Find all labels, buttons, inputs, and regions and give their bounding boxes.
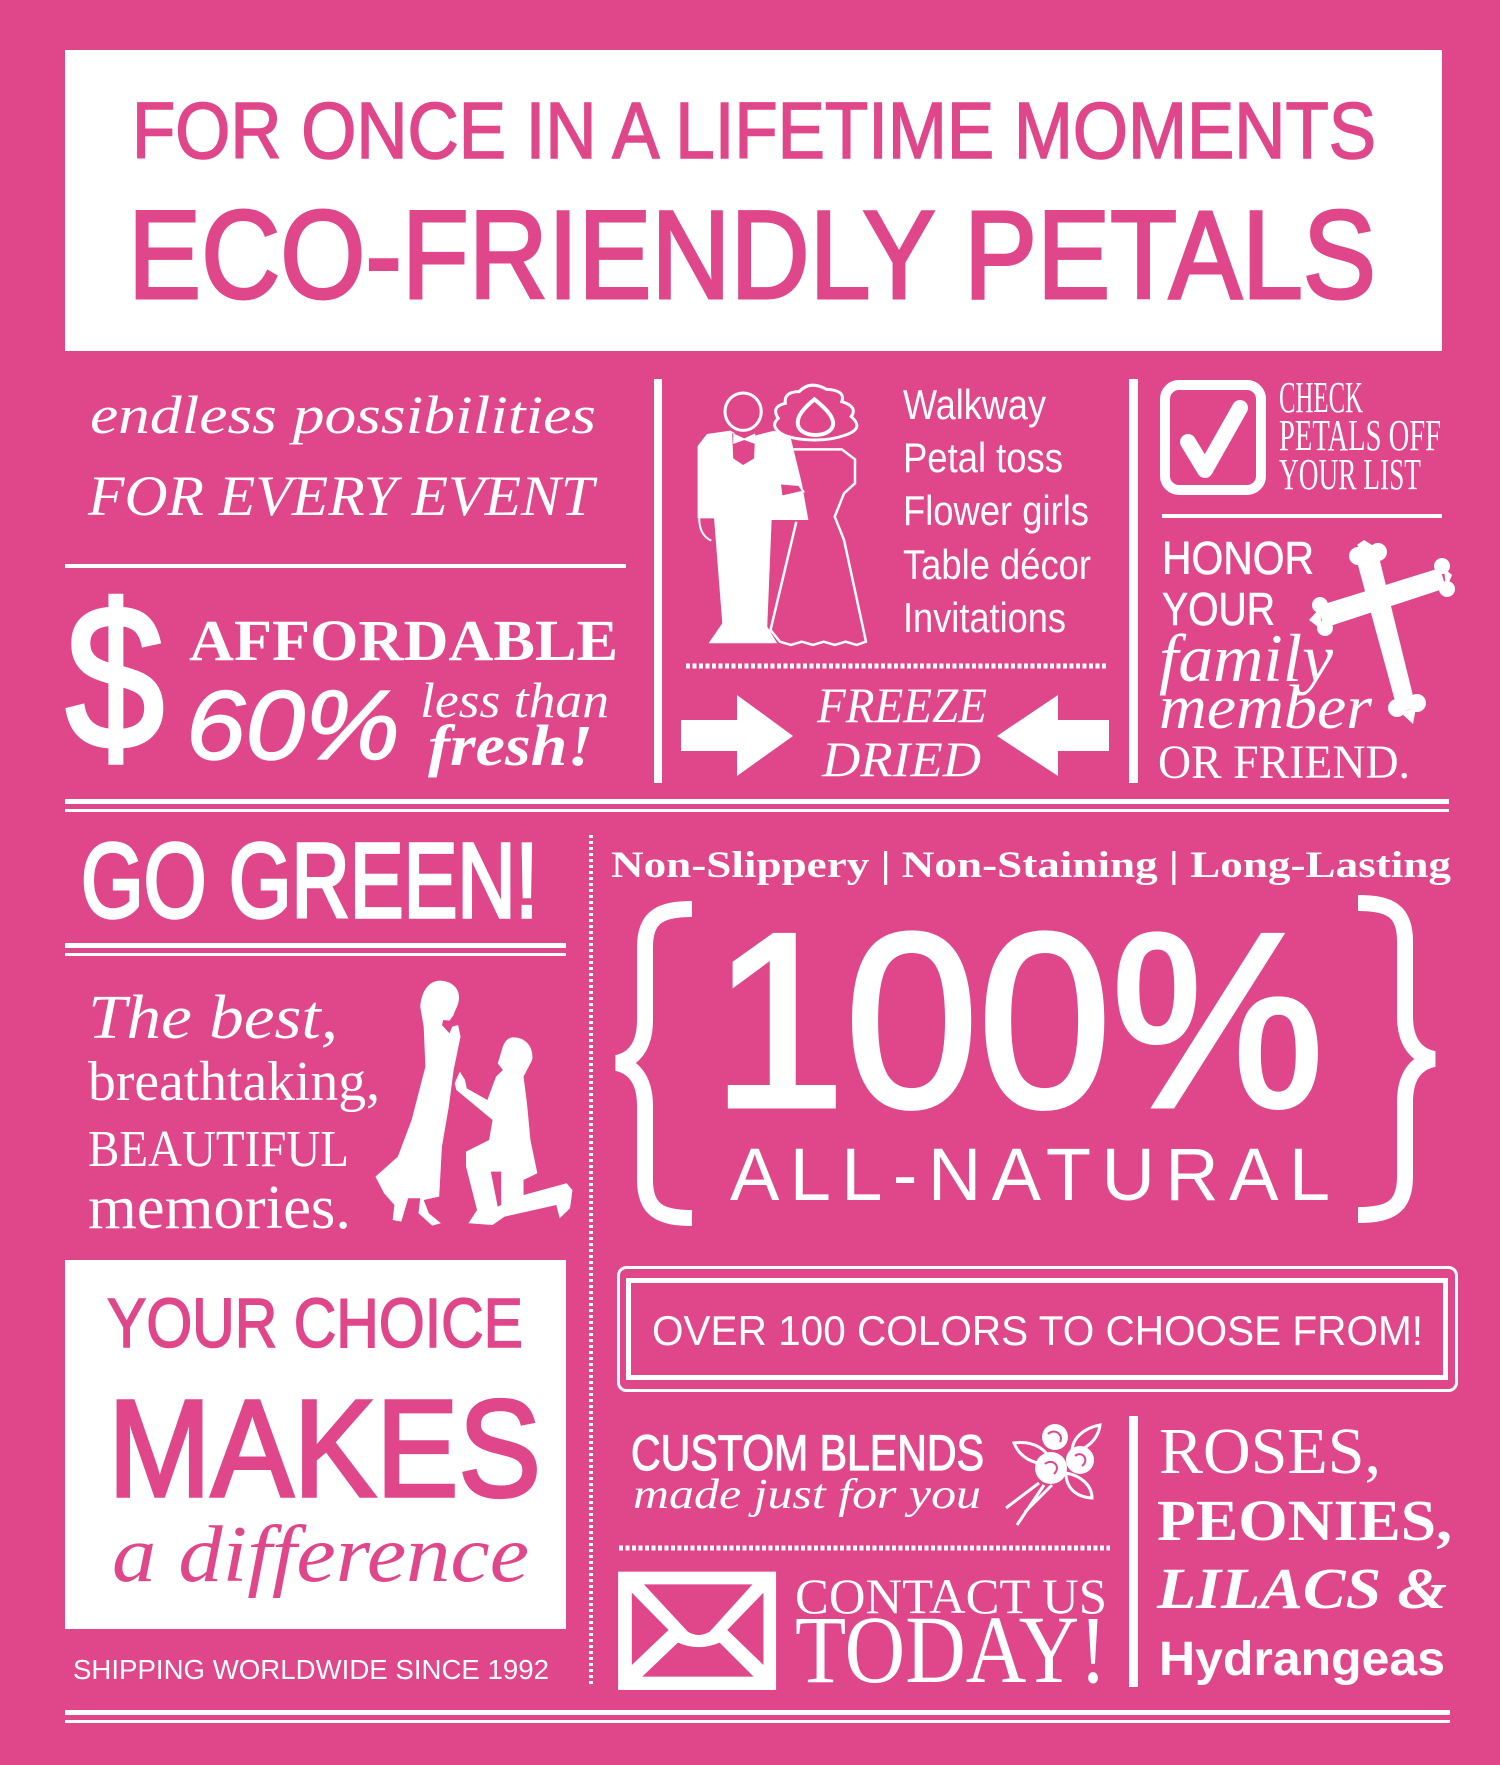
panel: affordable bbox=[66, 563, 618, 792]
panel: honor family member bbox=[1158, 532, 1455, 789]
panel: flower types bbox=[1156, 1415, 1452, 1686]
panel: endless possibilities bbox=[87, 385, 598, 528]
list of uses bbox=[903, 381, 1091, 641]
contact us: CONTACT US bbox=[795, 1568, 1107, 1624]
list of uses: Table décor bbox=[903, 541, 1091, 588]
right brace bbox=[1358, 903, 1434, 1215]
icon: envelope bbox=[618, 1572, 776, 1690]
dried: DRIED bbox=[821, 731, 981, 787]
left brace bbox=[617, 909, 692, 1218]
sixty percent: 60% bbox=[186, 670, 400, 780]
arrow: left bbox=[997, 695, 1109, 776]
hydrangeas: Hydrangeas bbox=[1159, 1633, 1445, 1686]
panel: colors box bbox=[618, 1268, 1456, 1390]
your choice: YOUR CHOICE bbox=[107, 1284, 523, 1362]
today: TODAY! bbox=[795, 1596, 1107, 1703]
honor: HONOR bbox=[1162, 532, 1314, 584]
panel: go green bbox=[65, 822, 572, 1242]
colors text: OVER 100 COLORS TO CHOOSE FROM! bbox=[652, 1307, 1423, 1354]
checklist text: CHECK bbox=[1279, 373, 1363, 422]
made just for you: made just for you bbox=[633, 1472, 981, 1518]
icon: cross bbox=[1309, 540, 1455, 724]
peonies: PEONIES, bbox=[1157, 1488, 1452, 1553]
the best text: BEAUTIFUL bbox=[88, 1121, 349, 1178]
list of uses: Invitations bbox=[903, 594, 1066, 641]
icon: proposal silhouette bbox=[375, 981, 572, 1226]
your: YOUR bbox=[1162, 583, 1275, 635]
tagline script: endless possibilities bbox=[90, 385, 596, 445]
panel: your choice makes a difference bbox=[65, 1260, 566, 1629]
icon: dollar sign: $ bbox=[66, 563, 164, 792]
checklist text bbox=[1279, 373, 1441, 499]
family: family bbox=[1159, 620, 1334, 696]
the best text bbox=[88, 984, 380, 1242]
less than: less than bbox=[420, 672, 609, 728]
heading: go green: GO GREEN! bbox=[81, 822, 538, 940]
icon: bouquet bbox=[1006, 1424, 1100, 1525]
affordable heading: AFFORDABLE bbox=[189, 608, 618, 673]
panel: freeze dried bbox=[681, 677, 1109, 787]
the best text: memories. bbox=[88, 1174, 351, 1242]
a difference: a difference bbox=[112, 1511, 529, 1599]
list of uses: Walkway bbox=[903, 381, 1046, 428]
or friend: OR FRIEND. bbox=[1158, 736, 1410, 789]
panel: checklist bbox=[1165, 373, 1441, 499]
benefits line: Non-Slippery | Non-Staining | Long-Lasting bbox=[611, 845, 1452, 886]
makes: MAKES bbox=[108, 1372, 541, 1526]
lilacs: LILACS & bbox=[1156, 1556, 1447, 1621]
list of uses: Petal toss bbox=[903, 434, 1063, 481]
shipping note: SHIPPING WORLDWIDE SINCE 1992 bbox=[73, 1654, 549, 1685]
icon: check box bbox=[1165, 385, 1261, 490]
member: member bbox=[1159, 674, 1373, 742]
roses: ROSES, bbox=[1159, 1415, 1381, 1488]
arrow: right bbox=[681, 695, 793, 776]
panel: contact us bbox=[618, 1568, 1107, 1703]
panel: wedding uses bbox=[698, 381, 1091, 645]
panel: custom blends bbox=[631, 1424, 1100, 1525]
panel: header banner bbox=[65, 50, 1442, 351]
the best text: The best, bbox=[88, 984, 338, 1052]
freeze: FREEZE bbox=[816, 677, 987, 733]
title line one: FOR ONCE IN A LIFETIME MOMENTS bbox=[132, 86, 1376, 175]
all natural: ALL-NATURAL bbox=[730, 1133, 1330, 1216]
tagline caps: FOR EVERY EVENT bbox=[87, 465, 598, 528]
custom blends heading: CUSTOM BLENDS bbox=[631, 1425, 984, 1481]
panel: one hundred percent all natural bbox=[611, 845, 1452, 1218]
list of uses: Flower girls bbox=[903, 487, 1089, 534]
hundred percent: 100% bbox=[712, 881, 1324, 1159]
fresh: fresh! bbox=[428, 713, 593, 778]
icon: bride and groom bbox=[698, 385, 866, 645]
the best text: breathtaking, bbox=[88, 1051, 380, 1113]
